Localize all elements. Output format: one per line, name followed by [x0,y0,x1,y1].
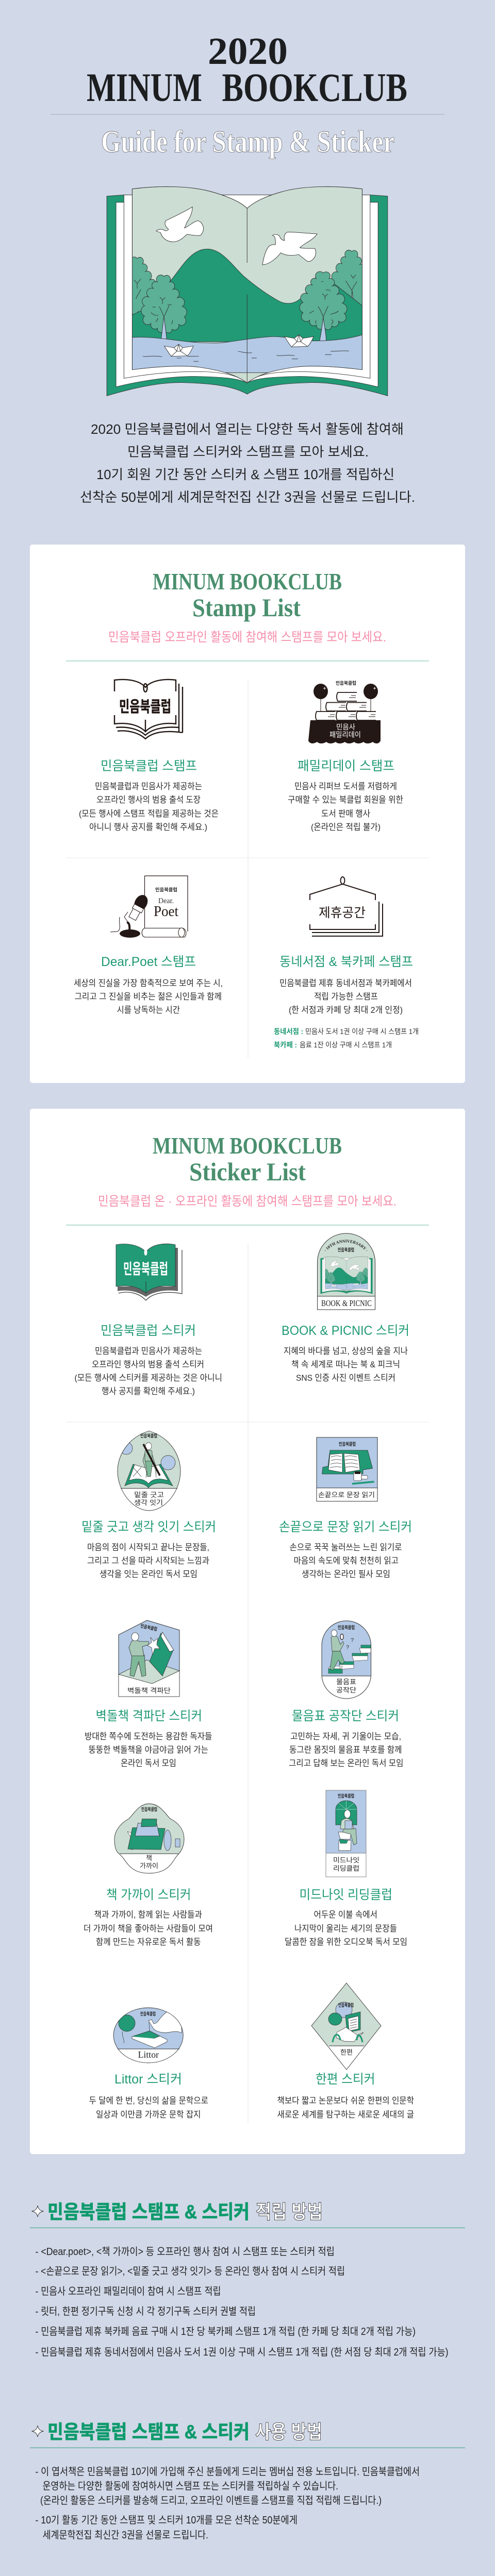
header title [87,30,407,110]
partner space description: (한 서점과 카페 당 최대 2개 인정) [289,1005,403,1015]
icon: midnight reading club sticker: 미드나잇 [333,1856,359,1864]
icon: littor sticker [113,2008,184,2063]
midnight reading club description: 어두운 이불 속에서 [314,1910,377,1920]
icon: question mark sticker: 민음북클럽 [338,1624,355,1630]
panel: sticker list [30,1109,465,2154]
intro paragraph: 2020 민음북클럽에서 열리는 다양한 독서 활동에 참여해 [91,421,404,437]
littor description [89,2096,208,2120]
icon: dear poet stamp [110,876,188,938]
dear poet description [74,978,223,1015]
midnight reading club title: 미드나잇 리딩클럽 [299,1888,392,1902]
icon: book and picnic badge: · 10TH ANNIVERSARY · [325,1240,367,1251]
book and picnic title: BOOK & PICNIC 스티커 [282,1324,409,1338]
partner space notes: 민음사 도서 1권 이상 구매 시 스탬프 1개 [305,1027,419,1036]
use list: 운영하는 다양한 활동에 참여하시면 스탬프 또는 스티커를 적립하실 수 있습니다. [42,2480,338,2492]
icon: hanpyeon sticker [311,1983,382,2070]
dear poet description: 그리고 그 진실을 비추는 젊은 시인들과 함께 [74,992,222,1002]
icon: sparkle [32,2426,43,2437]
brick book sticker title: 벽돌책 격파단 스티커 [96,1709,202,1723]
stamp description: 민음북클럽과 민음사가 제공하는 [95,782,202,791]
family day description: (온라인은 적립 불가) [311,822,381,832]
section heading: 민음북클럽 스탬프 & 스티커 [47,2421,250,2443]
icon: minum bookclub stamp [114,680,183,739]
icon: minum bookclub sticker [116,1244,182,1300]
book and picnic description: SNS 인증 사진 이벤트 스티커 [296,1373,395,1383]
icon: family day stamp [308,680,381,743]
midnight reading club description [285,1910,407,1947]
sticker description: 오프라인 행사의 범용 출석 스티커 [92,1360,204,1369]
section heading: 사용 방법 [255,2421,322,2443]
collect list: - 민음사 오프라인 패밀리데이 참여 시 스탬프 적립 [35,2285,221,2297]
question mark sticker description: 동그란 몸짓의 물음표 부호를 함께 [289,1745,402,1755]
underline sticker description [87,1543,209,1579]
question mark sticker title: 물음표 공작단 스티커 [292,1709,399,1723]
sticker description: 민음북클럽과 민음사가 제공하는 [95,1346,202,1356]
icon: question mark sticker [322,1621,371,1699]
partner space description [279,978,412,1015]
section: how to collect [30,2201,465,2358]
stamp subheading: 민음북클럽 오프라인 활동에 참여해 스탬프를 모아 보세요. [108,630,386,645]
icon: underline sticker: 생각 잇기 [134,1499,163,1506]
hanpyeon description: 책보다 짧고 논문보다 쉬운 한편의 인문학 [277,2096,414,2106]
intro paragraph: 선착순 50분에게 세계문학전집 신간 3권을 선물로 드립니다. [80,489,415,505]
icon: midnight reading club sticker: 민음북클럽 [338,1793,354,1799]
sticker heading: Sticker List [189,1157,306,1186]
icon: book and picnic badge [317,1233,375,1310]
question mark sticker description: 고민하는 자세, 귀 기울이는 모습, [290,1732,401,1741]
family day description: 구매할 수 있는 북클럽 회원을 위한 [288,795,403,805]
icon: transcription sticker: 손끝으로 문장 읽기 [318,1491,375,1499]
midnight reading club description: 달콤한 잠을 위한 오디오북 독서 모임 [285,1937,407,1947]
stamp description: (모든 행사에 스탬프 적립을 제공하는 것은 [79,809,219,819]
intro paragraph: 10기 회원 기간 동안 스티커 & 스탬프 10개를 적립하신 [96,467,394,482]
icon: transcription sticker: 민음북클럽 [339,1441,356,1447]
collect list: - <Dear.poet>, <책 가까이> 등 오프라인 행사 참여 시 스탬프 또는 스티커 적립 [35,2246,335,2258]
brick book sticker description: 온라인 독서 모임 [121,1758,176,1768]
hanpyeon description: 새로운 세계를 탐구하는 새로운 세대의 글 [277,2110,414,2120]
icon: family day stamp: 민음사 [336,723,355,731]
icon: underline sticker: 민음북클럽 [140,1433,157,1438]
sticker description [74,1346,222,1396]
sticker title: 민음북클럽 스티커 [101,1324,196,1338]
icon: close to books sticker: 책 [146,1854,152,1862]
book and picnic description [284,1346,408,1383]
use list: - 이 엽서책은 민음북클럽 10기에 가입해 주신 분들에게 드리는 멤버십 전용 노트입니다. 민음북클럽에서 [35,2466,420,2478]
brick book sticker description: 방대한 쪽수에 도전하는 용감한 독자들 [85,1732,212,1741]
icon: close to books sticker: 가까이 [140,1862,158,1870]
partner space notes: 동네서점 : [274,1027,303,1036]
sticker heading: MINUM BOOKCLUB [153,1132,342,1159]
title year: 2020 [208,30,288,73]
stamp description: 오프라인 행사의 범용 출석 도장 [96,795,201,805]
sticker description: (모든 행사에 스티커를 제공하는 것은 아니니 [74,1373,222,1383]
partner space description: 민음북클럽 제휴 동네서점과 북카페에서 [279,978,412,988]
stamp title: 민음북클럽 스탬프 [101,759,197,773]
littor title: Littor 스티커 [114,2072,182,2087]
stamp description: 아니니 행사 공지를 확인해 주세요.) [89,822,207,832]
dear poet description: 시를 낭독하는 시간 [117,1005,180,1015]
close to books description: 함께 만드는 자유로운 독서 활동 [96,1937,201,1947]
icon: brick book sticker: 벽돌책 격파단 [127,1687,171,1694]
illustration: open book with landscape [107,187,388,396]
icon: transcription sticker [317,1437,377,1501]
icon: midnight reading club sticker: 리딩클럽 [333,1865,359,1872]
icon: brick book sticker: 민음북클럽 [140,1623,158,1632]
icon: close to books sticker [114,1804,184,1874]
hanpyeon description [277,2096,414,2120]
collect list: - 릿터, 한편 정기구독 신청 시 각 정기구독 스티커 권별 적립 [35,2306,256,2317]
panel: stamp list [30,545,465,1083]
icon: book and picnic badge: BOOK & PICNIC [321,1298,372,1308]
icon: close to books sticker: 민음북클럽 [141,1806,157,1812]
icon: dear poet stamp: 민음북클럽 [155,887,177,892]
icon: book and picnic badge: 민음북클럽 [338,1247,354,1252]
collect list: - 민음북클럽 제휴 동네서점에서 민음사 도서 1권 이상 구매 시 스탬프 1개 적립 (한 서점 당 최대 2개 적립 가능) [35,2346,449,2358]
use list: (온라인 활동은 스티커를 발송해 드리고, 오프라인 이벤트를 스탬프를 직접 적립해 드립니다.) [40,2495,382,2506]
close to books description [84,1910,213,1947]
icon: question mark sticker: 공작단 [336,1686,356,1694]
sticker subheading: 민음북클럽 온 · 오프라인 활동에 참여해 스탬프를 모아 보세요. [98,1194,397,1209]
stamp description [79,782,219,832]
icon: dear poet stamp: Poet [154,904,178,920]
icon: hanpyeon sticker: 한편 [340,2048,353,2056]
icon: minum bookclub sticker: 민음북클럽 [123,1261,168,1278]
title name: BOOKCLUB [222,65,407,110]
book and picnic description: 지혜의 바다를 넘고, 상상의 숲을 지나 [284,1346,408,1356]
icon: brick book sticker [119,1620,179,1697]
intro paragraph [80,421,415,505]
partner space notes: 북카페 : [274,1041,297,1049]
icon: family day stamp: 패밀리데이 [329,731,361,739]
stamp heading: MINUM BOOKCLUB [153,568,342,595]
icon: question mark sticker: ? [346,1645,349,1651]
icon: sparkle [32,2206,43,2217]
brick book sticker description: 뚱뚱한 벽돌책을 야금야금 읽어 가는 [89,1745,208,1755]
littor description: 두 달에 한 번, 당신의 삶을 문학으로 [89,2096,208,2106]
collect list: - 민음북클럽 제휴 북카페 음료 구매 시 1잔 당 북카페 스탬프 1개 적립 (한 카페 당 최대 2개 적립 가능) [35,2326,416,2337]
use list: - 10기 활동 기간 동안 스탬프 및 스티커 10개를 모은 선착순 50분에게 [35,2514,298,2526]
sticker description: 행사 공지를 확인해 주세요.) [102,1386,195,1396]
sticker heading [153,1132,342,1186]
icon: hanpyeon sticker: 민음북클럽 [338,2002,354,2008]
question mark sticker description: 그리고 답해 보는 온라인 독서 모임 [289,1758,403,1768]
icon: question mark sticker: ? [351,1637,354,1643]
partner space description: 적립 가능한 스탬프 [314,992,378,1002]
underline sticker description: 생각을 잇는 온라인 독서 모임 [100,1569,197,1579]
dear poet title: Dear.Poet 스탬프 [101,955,196,969]
underline sticker description: 마음의 점이 시작되고 끝나는 문장들, [87,1543,209,1552]
icon: underline sticker: 밑줄 긋고 [134,1491,164,1499]
transcription sticker description: 생각하는 온라인 필사 모임 [302,1569,390,1579]
transcription sticker description [290,1543,402,1579]
title name [87,65,407,110]
icon: family day stamp: 민음북클럽 [336,680,356,686]
underline sticker title: 밑줄 긋고 생각 잇기 스티커 [81,1520,216,1534]
section heading: 적립 방법 [256,2201,323,2223]
question mark sticker description [289,1732,403,1768]
use list [35,2466,420,2541]
icon: dear poet stamp: Dear. [158,897,174,905]
title name: MINUM [87,65,202,110]
subtitle outlined: Guide for Stamp & Sticker [101,125,394,159]
stamp heading [153,568,342,622]
close to books description: 책과 가까이, 함께 읽는 사람들과 [94,1910,202,1920]
hanpyeon title: 한편 스티커 [316,2072,375,2087]
collect list [35,2246,449,2358]
book and picnic description: 책 속 세계로 떠나는 북 & 피크닉 [291,1360,400,1369]
transcription sticker title: 손끝으로 문장 읽기 스티커 [279,1520,412,1534]
icon: partner space stamp [310,877,383,936]
littor description: 일상과 이만큼 가까운 문학 잡지 [96,2110,201,2120]
stamp heading: Stamp List [192,593,301,622]
close to books description: 더 가까이 책을 좋아하는 사람들이 모여 [84,1924,213,1934]
transcription sticker description: 마음의 속도에 맞춰 천천히 읽고 [294,1556,399,1566]
midnight reading club description: 나지막이 울리는 세기의 문장들 [294,1924,397,1934]
partner space notes: 음료 1잔 이상 구매 시 스탬프 1개 [300,1041,392,1049]
dear poet description: 세상의 진실을 가장 함축적으로 보여 주는 시, [74,978,223,988]
icon: midnight reading club sticker [326,1790,366,1877]
icon: partner space stamp: 제휴공간 [319,906,366,920]
section: how to use [30,2421,465,2541]
icon: underline sticker [118,1431,180,1511]
family day title: 패밀리데이 스탬프 [298,759,394,773]
section heading: 민음북클럽 스탬프 & 스티커 [47,2201,250,2223]
icon: littor sticker: Littor [138,2049,159,2060]
brick book sticker description [85,1732,212,1768]
partner space notes [274,1027,419,1049]
icon: minum bookclub stamp: 민음북클럽 [119,699,171,716]
collect list: - <손끝으로 문장 읽기>, <밑줄 긋고 생각 잇기> 등 온라인 행사 참여 시 스티커 적립 [35,2265,345,2277]
use list: 세계문학전집 최신간 3권을 선물로 드립니다. [42,2529,208,2541]
partner space title: 동네서점 & 북카페 스탬프 [279,955,413,969]
transcription sticker description: 손으로 꾹꾹 눌러쓰는 느린 읽기로 [290,1543,402,1552]
family day description: 민음사 리퍼브 도서를 저렴하게 [294,782,397,791]
underline sticker description: 그리고 그 선을 따라 시작되는 느낌과 [87,1556,209,1566]
family day description: 도서 판매 행사 [321,809,370,819]
icon: question mark sticker: 물음표 [336,1678,356,1686]
close to books title: 책 가까이 스티커 [106,1888,191,1902]
icon: littor sticker: 민음북클럽 [140,2011,156,2016]
intro paragraph: 민음북클럽 스티커와 스탬프를 모아 보세요. [127,444,369,460]
family day description [288,782,403,832]
